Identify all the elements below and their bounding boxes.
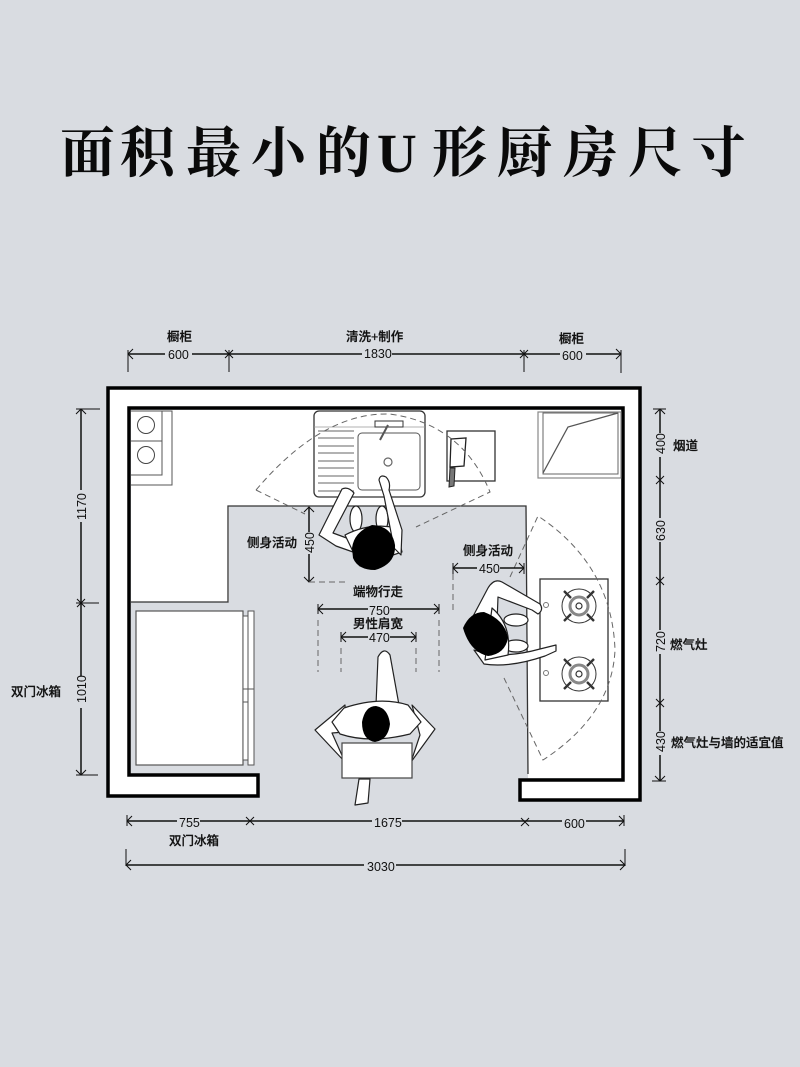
label: 400 flue: 烟道 bbox=[673, 438, 699, 453]
inner dimension: carrying walk: 750 bbox=[369, 604, 390, 618]
floor plan bbox=[108, 388, 640, 805]
sink bbox=[314, 411, 425, 497]
inner dimension: side activity horizontal: 侧身活动 bbox=[463, 543, 513, 558]
right dimensions bbox=[652, 409, 784, 781]
label: cabinet right: 橱柜 bbox=[559, 332, 584, 346]
swing arcs bbox=[256, 414, 615, 760]
label: wash and prep: 清洗+制作 bbox=[346, 329, 404, 344]
bottom dimensions bbox=[126, 815, 625, 874]
label: 755: 755 bbox=[179, 816, 200, 830]
label: 400 flue bbox=[653, 433, 699, 457]
label: 755: 双门冰箱 bbox=[169, 833, 219, 848]
label: 720 gas stove: 720 bbox=[654, 631, 668, 652]
label: 1170: 1170 bbox=[75, 493, 89, 520]
label: 720 gas stove bbox=[653, 630, 708, 654]
label: 600: 600 bbox=[564, 817, 585, 831]
walls bbox=[108, 388, 640, 800]
label: 1675: 1675 bbox=[374, 816, 402, 830]
label: 430 stove to wall bbox=[653, 731, 784, 755]
label: cabinet right bbox=[559, 332, 586, 363]
title: 面积最小的U形厨房尺寸 bbox=[60, 123, 746, 184]
label: double door fridge left: 双门冰箱 bbox=[11, 684, 61, 699]
label: cabinet right: 600 bbox=[562, 349, 583, 363]
person at sink bbox=[319, 476, 402, 570]
label: 3030: 3030 bbox=[367, 860, 395, 874]
label: wash and prep bbox=[346, 329, 404, 361]
label: wash and prep: 1830 bbox=[364, 347, 392, 361]
label: cabinet left: 600 bbox=[168, 348, 189, 362]
label: 430 stove to wall: 燃气灶与墙的适宜值 bbox=[671, 735, 784, 750]
label: 400 flue: 400 bbox=[654, 433, 668, 454]
inner dimension: carrying walk bbox=[318, 584, 439, 672]
label: 1010: 1010 bbox=[75, 675, 89, 703]
inner dimension: side activity vertical bbox=[247, 507, 345, 582]
cutting board with cleaver bbox=[447, 431, 495, 487]
left dimensions bbox=[11, 409, 100, 775]
inner dimension: male shoulder width bbox=[341, 616, 416, 672]
top dimensions bbox=[128, 329, 621, 373]
label: 720 gas stove: 燃气灶 bbox=[670, 637, 708, 652]
label: 630: 630 bbox=[654, 520, 668, 541]
corner cabinet with two circles bbox=[131, 411, 172, 485]
label: cabinet left: 橱柜 bbox=[167, 330, 192, 344]
counter tops bbox=[131, 410, 621, 778]
double door fridge bbox=[136, 611, 254, 765]
label: cabinet left bbox=[165, 330, 192, 362]
gas stove bbox=[540, 579, 608, 701]
label: 430 stove to wall: 430 bbox=[654, 731, 668, 752]
counter edge bbox=[131, 506, 528, 774]
inner dimension: side activity vertical: 侧身活动 bbox=[247, 535, 297, 550]
inner dimension: male shoulder width: 男性肩宽 bbox=[353, 616, 404, 631]
flue bbox=[538, 412, 621, 478]
inner dimension: side activity vertical: 450 bbox=[303, 532, 317, 553]
inner dimension: side activity horizontal: 450 bbox=[479, 562, 500, 576]
inner dimension: carrying walk: 端物行走 bbox=[353, 584, 404, 599]
person carrying tray bbox=[315, 651, 435, 805]
label: 755 bbox=[169, 815, 219, 848]
person at stove bbox=[463, 581, 556, 665]
inner dimension: male shoulder width: 470 bbox=[369, 631, 390, 645]
inner dimension: side activity horizontal bbox=[453, 543, 524, 610]
